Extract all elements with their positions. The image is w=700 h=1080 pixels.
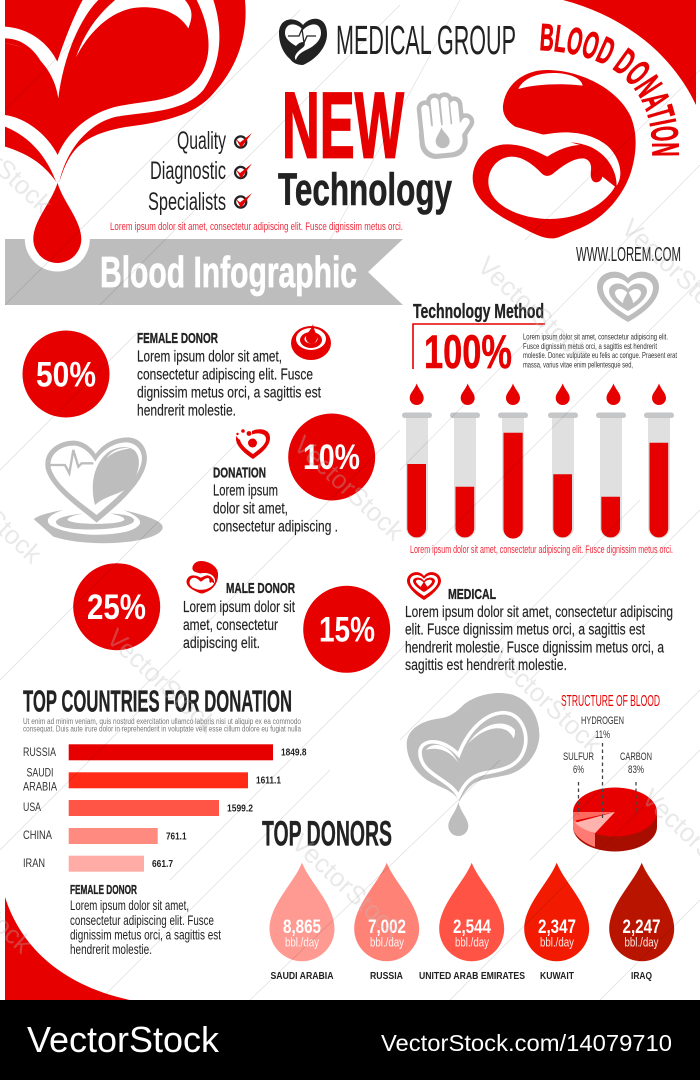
bar chart: top countries: IRAN [23, 856, 45, 870]
text block: medical: MEDICAL [448, 586, 496, 603]
text: VectorStock [472, 250, 595, 368]
text block: medical [405, 586, 673, 674]
labels: pie chart: SULFUR [563, 751, 594, 763]
text block: male donor [183, 580, 295, 652]
labels: pie chart: CARBON [620, 751, 652, 763]
heading: Medical Group: MEDICAL GROUP [336, 17, 516, 63]
text block: donation: Lorem ipsum [213, 482, 278, 500]
labels: pie chart [563, 715, 652, 776]
icon: red heart with drop [407, 572, 441, 600]
footer: vectorstock bar: VectorStock.com/14079710 [381, 1030, 672, 1056]
icon: red heart with cells [236, 425, 270, 459]
heading: top donors: TOP DONORS [262, 814, 392, 854]
chart: donor drops: bbl./day [624, 936, 659, 950]
text block: female donor lower: FEMALE DONOR [70, 882, 137, 897]
chart: donor drops: bbl./day [455, 936, 490, 950]
text block: donation: dolor sit amet, [213, 500, 288, 518]
icon: grey heart with drop [597, 272, 659, 322]
chart: donor drops [270, 863, 674, 982]
text block: female donor lower: Lorem ipsum dolor sit amet, [70, 897, 189, 913]
stat: 10% circle: 10% [303, 438, 360, 477]
heading: Blood Donation curved: BLOOD DONATION [540, 24, 680, 156]
stat: 25% circle [73, 563, 160, 650]
chart: donor drops: bbl./day [370, 936, 405, 950]
heading: Technology Method: Technology Method [413, 301, 544, 323]
text block: female donor: hendrerit molestie. [137, 402, 236, 420]
stat: 100%: 100% [424, 325, 512, 378]
bar chart: top countries: 761.1 [166, 832, 187, 842]
text: VectorStock [486, 642, 609, 760]
banner: Blood Infographic [5, 183, 403, 305]
text block: female donor lower: dignissim metus orci, a sagittis est [70, 926, 221, 942]
chart: donor drops: KUWAIT [540, 970, 574, 982]
icon: large red blood logo [473, 70, 636, 238]
chart: donor drops: 7,002 [368, 917, 406, 938]
bar chart: top countries: RUSSIA [23, 745, 56, 759]
stat: 10% circle [288, 414, 375, 500]
text: countries description [23, 717, 301, 734]
text block: female donor [137, 330, 321, 420]
bar chart: top countries: USA [23, 800, 41, 814]
bar chart: top countries [23, 744, 307, 872]
text block: male donor: MALE DONOR [226, 580, 295, 597]
chart: donor drops: 2,247 [622, 917, 660, 938]
labels: pie chart: HYDROGEN [581, 715, 624, 727]
stat: 50% circle: 50% [36, 356, 96, 394]
text block: donation [213, 464, 338, 536]
stat: 50% circle [22, 330, 110, 418]
text block: donation: DONATION [213, 464, 266, 482]
bar chart: top countries: 1611.1 [256, 776, 281, 786]
icon: large grey heart with drop [407, 693, 539, 836]
heading: Technology: Technology [278, 164, 452, 215]
chart: donor drops: 8,865 [283, 917, 321, 938]
icon: grey heart pulse with ripple [34, 437, 163, 543]
text: countries description: Ut enim ad minim veniam, quis nostrud exercitation ullamco laboris nisi ut aliquip ex ea commodo [23, 717, 301, 726]
text block: female donor lower: consectetur adipiscing elit. Fusce [70, 912, 214, 928]
labels: pie chart: 6% [573, 764, 584, 776]
labels: pie chart: 11% [595, 729, 610, 741]
bar chart: top countries: ARABIA [23, 780, 57, 794]
bar chart: top countries: SAUDI [26, 766, 54, 780]
bar chart: top countries: 1599.2 [227, 804, 253, 814]
text: method description [523, 332, 677, 370]
footer: vectorstock bar: VectorStock [27, 1019, 220, 1060]
text: countries description: consequat. Duis aute irure dolor in reprehenderit in voluptate velit esse cillum dolore eu fugiat nulla [23, 724, 301, 734]
chart: test tubes [402, 384, 674, 539]
chart: donor drops: bbl./day [540, 936, 575, 950]
bar chart: top countries: 1849.8 [281, 748, 307, 758]
panel: technology method [413, 301, 677, 378]
text block: female donor: FEMALE DONOR [137, 330, 218, 347]
text block: donation: consectetur adipiscing . [213, 518, 338, 536]
text: VectorStock [288, 429, 411, 547]
text block: female donor: consectetur adipiscing elit. Fusce [137, 366, 313, 384]
text block: female donor lower: hendrerit molestie. [70, 941, 152, 957]
icon: medical group logo [279, 19, 327, 65]
text: VectorStock [101, 622, 224, 740]
banner: Blood Infographic: Blood Infographic [100, 248, 357, 297]
caption: red lorem line: Lorem ipsum dolor sit amet, consectetur adipiscing elit. Fusce dignissim metus orci. [110, 221, 403, 233]
checklist: quality items: Specialists [148, 188, 226, 216]
chart: donor drops: 2,544 [453, 917, 491, 938]
heading: top countries: TOP COUNTRIES FOR DONATION [23, 684, 292, 718]
icon: small red blood logo [187, 561, 218, 594]
checklist: quality items: Diagnostic [150, 157, 226, 185]
chart: donor drops: RUSSIA [370, 970, 403, 982]
chart: donor drops: IRAQ [631, 970, 652, 982]
icon: top-left blood heart [5, 0, 246, 182]
stat: 25% circle: 25% [87, 588, 146, 627]
checklist: quality items [148, 127, 252, 216]
pie chart: blood composition [573, 788, 657, 851]
bar chart: top countries: CHINA [23, 828, 52, 842]
text: VectorStock [286, 827, 409, 945]
icon: grey hand with drop [416, 98, 469, 161]
footer: vectorstock bar [0, 1000, 700, 1080]
text block: medical: sagittis est hendrerit molestie. [405, 657, 567, 674]
chart: donor drops: bbl./day [285, 936, 320, 950]
bar chart: top countries: 661.7 [152, 859, 173, 870]
shape: bottom-left red corner [5, 897, 130, 1000]
labels: pie chart: 83% [628, 764, 644, 776]
text block: female donor lower [70, 882, 221, 957]
stat: 15% circle [303, 586, 390, 673]
text block: female donor: Lorem ipsum dolor sit amet, [137, 348, 282, 366]
chart: donor drops: SAUDI ARABIA [270, 970, 334, 982]
text block: female donor: dignissim metus orci, a sagittis est [137, 384, 321, 402]
chart: donor drops: 2,347 [538, 917, 576, 938]
heading: New: NEW [282, 72, 404, 178]
text block: male donor: amet, consectetur [183, 617, 279, 634]
text: method description: massa, varius vitae enim pellentesque sed, [523, 360, 633, 370]
stat: 15% circle: 15% [319, 610, 375, 650]
panel: structure of blood [561, 693, 660, 851]
text block: male donor: Lorem ipsum dolor sit [183, 599, 295, 616]
chart: donor drops: UNITED ARAB EMIRATES [419, 970, 525, 982]
checklist: quality items: Quality [177, 127, 226, 155]
text block: male donor: adipiscing elit. [183, 635, 260, 652]
shape: top-right red corner [563, 0, 696, 105]
icon: red drop ripple [291, 324, 331, 360]
